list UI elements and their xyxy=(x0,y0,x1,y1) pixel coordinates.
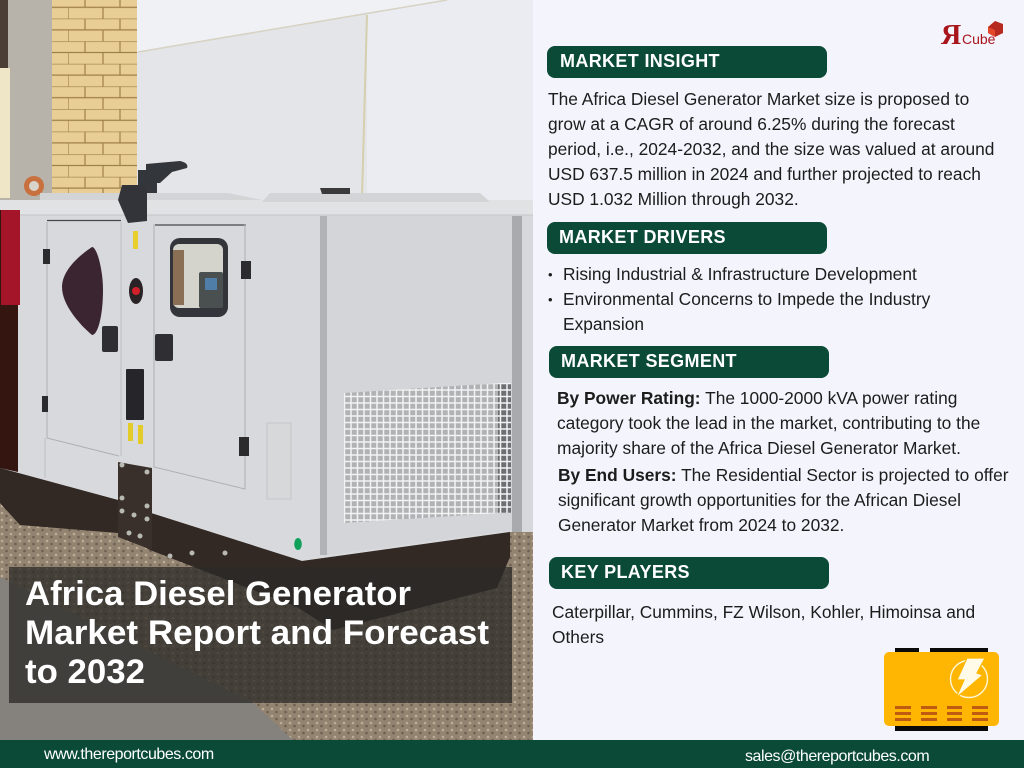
text block: market insight xyxy=(548,89,994,209)
heading: key players: KEY PLAYERS xyxy=(561,562,690,582)
text block: market insight: USD 637.5 million in 2024 and further projected to reach xyxy=(548,164,981,184)
generator details: exhaust, window, latches xyxy=(42,161,350,456)
generator base skid xyxy=(0,462,510,630)
heading: market drivers: MARKET DRIVERS xyxy=(559,227,726,247)
text block: market insight: period, i.e., 2024-2032, and the size was valued at around xyxy=(548,139,994,159)
text block: by power rating xyxy=(557,388,980,458)
list: market drivers: • xyxy=(548,292,553,307)
right panel xyxy=(327,216,512,555)
logo: RCube xyxy=(941,20,1003,48)
title: Africa Diesel Generator xyxy=(25,575,411,613)
logo: RCube: Cube xyxy=(962,31,996,47)
text block: by end users: significant growth opportunities for the African Diesel xyxy=(558,490,961,510)
footer website: www.thereportcubes.com xyxy=(44,746,214,763)
list: market drivers: Environmental Concerns to Impede the Industry xyxy=(563,289,930,309)
footer bar xyxy=(0,740,1024,768)
heading: key players xyxy=(549,557,829,589)
text block: key players: Caterpillar, Cummins, FZ Wilson, Kohler, Himoinsa and xyxy=(552,602,975,622)
heading: market segment xyxy=(549,346,829,378)
ground: gravel and pavement xyxy=(0,440,533,740)
background wall and tent xyxy=(0,0,533,230)
text block: by power rating: By Power Rating: The 1000-2000 kVA power rating xyxy=(557,388,957,408)
title: to 2032 xyxy=(25,653,145,691)
heading: market insight: MARKET INSIGHT xyxy=(560,51,720,71)
top rim xyxy=(0,200,533,215)
text block: key players: Others xyxy=(552,627,604,647)
door left xyxy=(47,222,119,456)
text block: key players xyxy=(552,602,975,647)
vent mesh xyxy=(344,383,501,523)
text block: by end users: By End Users: The Residential Sector is projected to offer xyxy=(558,465,1009,485)
text block: by end users xyxy=(558,465,1009,535)
heading: market insight xyxy=(547,46,827,78)
text block: market insight: grow at a CAGR of around 6.25% during the forecast xyxy=(548,114,955,134)
footer email: sales@thereportcubes.com xyxy=(745,748,929,765)
list: market drivers: • xyxy=(548,267,553,282)
text block: by power rating: majority share of the Africa Diesel Generator Market. xyxy=(557,438,961,458)
heading: market drivers xyxy=(547,222,827,254)
list: market drivers xyxy=(548,264,930,334)
title: Market Report and Forecast xyxy=(25,614,489,652)
text block: by end users: Generator Market from 2024 to 2032. xyxy=(558,515,844,535)
list: market drivers: Expansion xyxy=(563,314,644,334)
title xyxy=(25,575,489,691)
text block: market insight: USD 1.032 Million through 2032. xyxy=(548,189,799,209)
heading: market segment: MARKET SEGMENT xyxy=(561,351,737,371)
door right xyxy=(154,224,245,489)
title overlay band xyxy=(9,567,512,703)
list: market drivers: Rising Industrial & Infrastructure Development xyxy=(563,264,917,284)
generator enclosure xyxy=(0,193,533,561)
photo: diesel generator with title overlay xyxy=(0,0,533,740)
left red stripe xyxy=(0,210,18,472)
text block: market insight: The Africa Diesel Generator Market size is proposed to xyxy=(548,89,969,109)
text block: by power rating: category took the lead in the market, contributing to the xyxy=(557,413,980,433)
icon: generator with lightning bolt xyxy=(884,648,999,731)
